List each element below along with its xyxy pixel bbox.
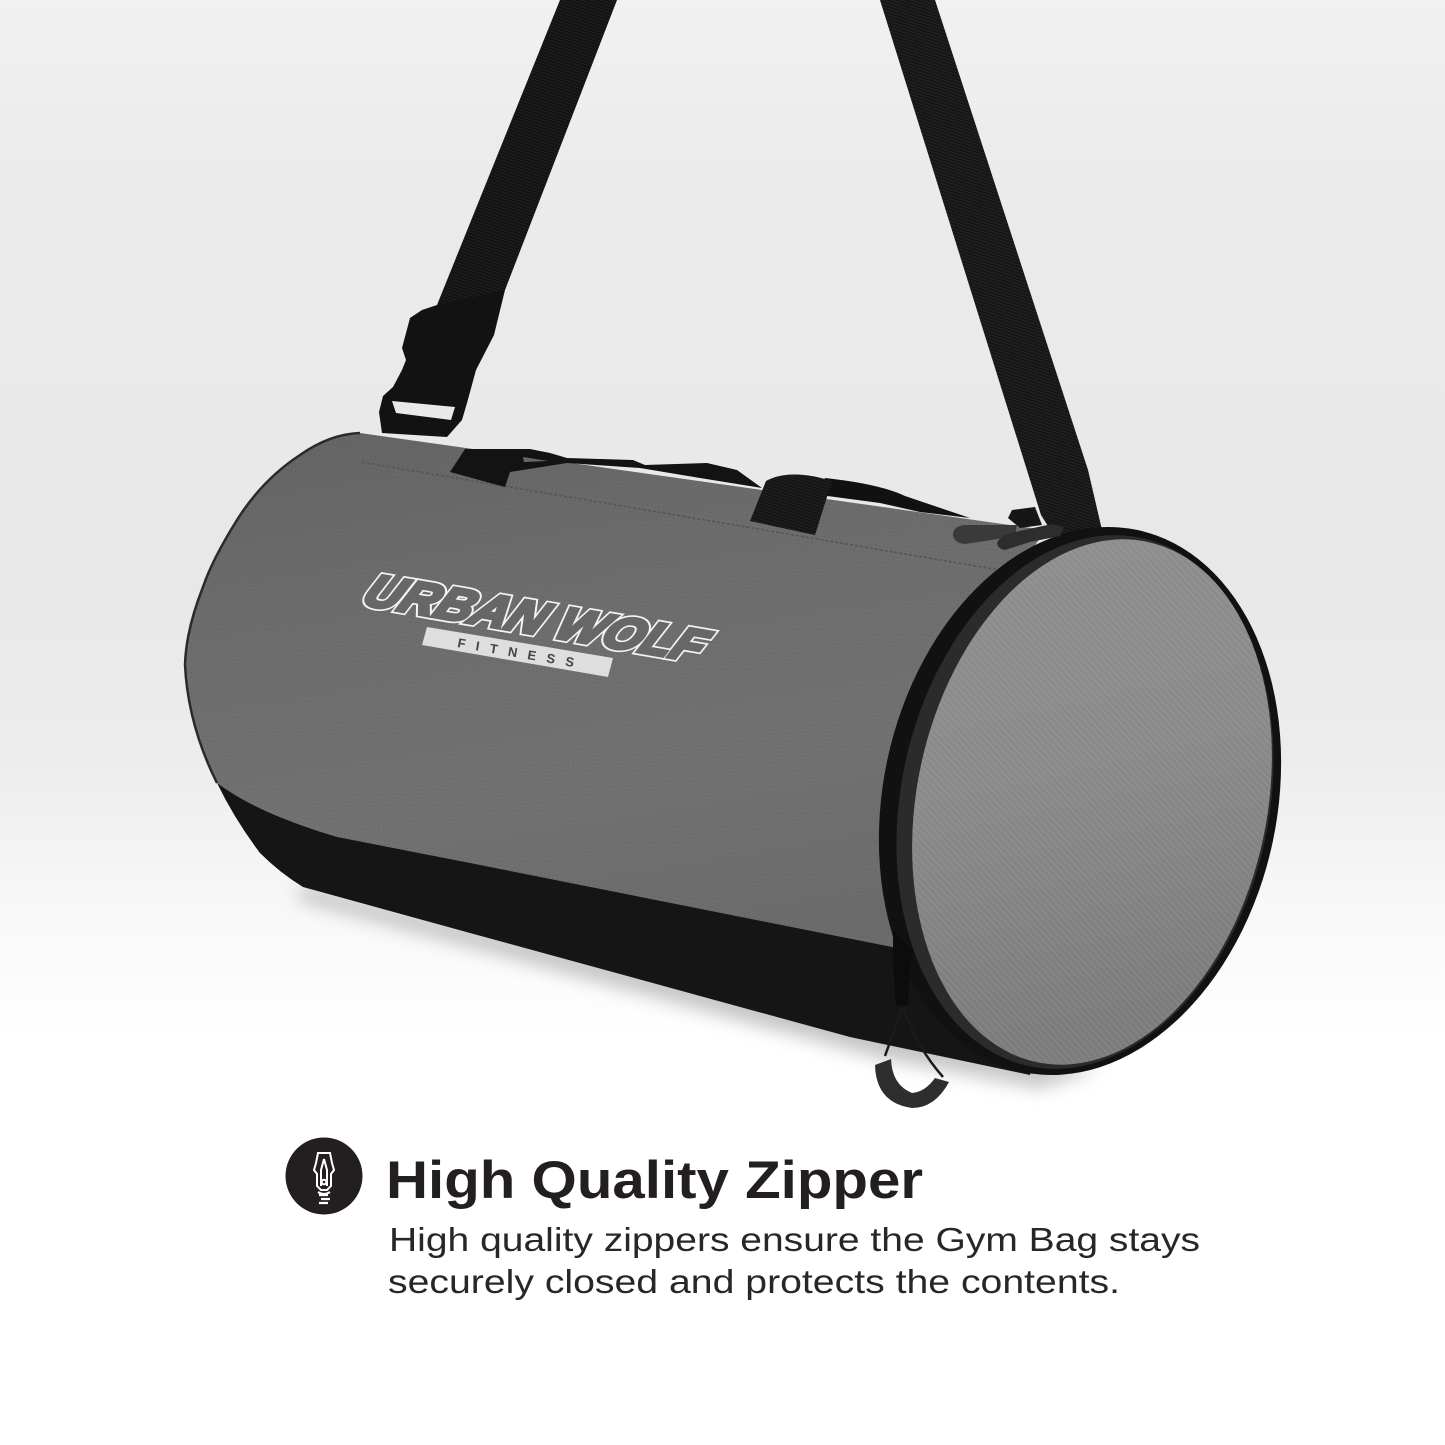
lower zipper slider and C-shaped pull bbox=[875, 930, 949, 1108]
top zipper pulls bbox=[953, 507, 1064, 550]
left edge seam bbox=[185, 433, 360, 783]
left shoulder strap with buckle bbox=[379, 0, 617, 437]
right shoulder strap bbox=[880, 0, 1102, 545]
ground shadow bbox=[300, 885, 1100, 1088]
description: High quality zippers ensure the Gym Bag stays bbox=[389, 1222, 1200, 1259]
icon: zipper badge bbox=[286, 1138, 362, 1214]
gym bag bbox=[185, 0, 1330, 1113]
left carry handle bbox=[450, 449, 762, 488]
bag body: grey fabric bbox=[185, 433, 1045, 990]
right carry handle bbox=[750, 474, 970, 535]
brand logo wordmark: URBAN WOLF bbox=[355, 566, 718, 672]
description: securely closed and protects the contents. bbox=[388, 1264, 1120, 1301]
fabric texture bbox=[185, 433, 1045, 990]
logo bar bbox=[422, 627, 613, 677]
bag body: black lower band bbox=[217, 783, 1040, 1075]
top stitch line bbox=[362, 462, 1000, 570]
logo subline: FITNESS bbox=[456, 635, 576, 670]
brand logo wordmark: URBAN WOLF bbox=[355, 566, 718, 672]
description bbox=[388, 1222, 1200, 1301]
round end panel with zipper tape bbox=[830, 489, 1330, 1113]
heading: High Quality Zipper bbox=[386, 1151, 923, 1210]
